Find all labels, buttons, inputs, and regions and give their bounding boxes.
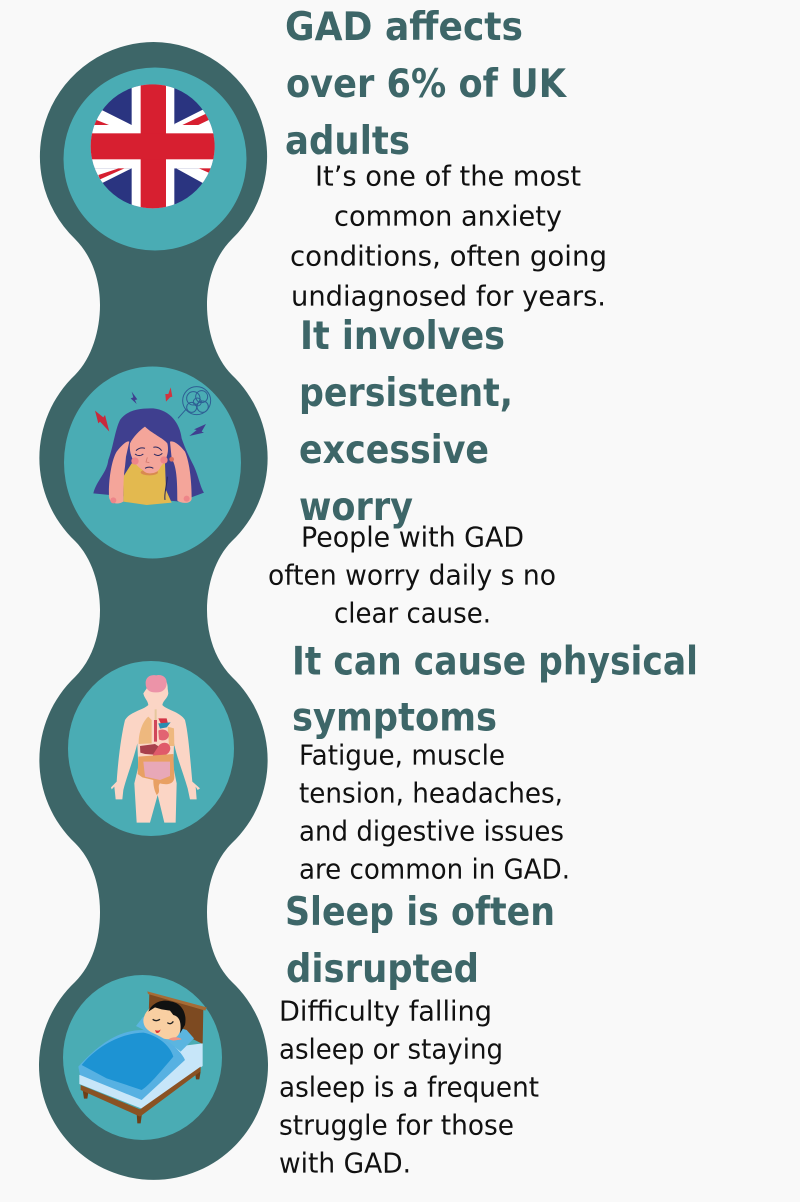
fact 1 text: [285, 4, 607, 312]
heading: disrupted sleep: [285, 889, 555, 992]
body: sleep detail: asleep is a frequent: [279, 1070, 539, 1104]
heading: GAD prevalence: GAD affects: [285, 4, 523, 50]
body: sleep detail: Difficulty falling: [279, 994, 492, 1028]
heading: physical symptoms: [292, 638, 698, 740]
icon: UK flag: [64, 68, 246, 250]
body: worry detail: often worry daily s no: [268, 558, 556, 592]
body: prevalence detail: undiagnosed for years.: [291, 280, 606, 312]
infographic: [39, 10, 696, 1180]
body: sleep detail: struggle for those: [279, 1108, 514, 1142]
body: symptoms detail: and digestive issues: [299, 814, 564, 848]
body: prevalence detail: It’s one of the most: [315, 160, 581, 192]
body: sleep detail: asleep or staying: [279, 1032, 503, 1066]
body: prevalence detail: conditions, often going: [290, 240, 607, 272]
heading: physical symptoms: It can cause physical: [292, 638, 698, 684]
body: symptoms detail: are common in GAD.: [299, 852, 570, 886]
heading: persistent worry: It involves: [300, 313, 505, 359]
heading: persistent worry: [299, 313, 513, 530]
fact 4 text: [279, 889, 555, 1180]
fact 3 text: [292, 638, 698, 886]
heading: persistent worry: excessive: [299, 427, 489, 473]
body: worry detail: clear cause.: [334, 596, 491, 630]
heading: GAD prevalence: over 6% of UK: [286, 61, 567, 107]
body: prevalence detail: [290, 160, 607, 312]
timeline spine: [39, 42, 268, 1180]
heading: physical symptoms: symptoms: [292, 694, 497, 740]
body: worry detail: [268, 520, 556, 630]
icon: human body organs: [68, 661, 234, 836]
icon: person sleeping in bed: [63, 975, 222, 1140]
heading: persistent worry: persistent,: [299, 370, 513, 416]
body: symptoms detail: Fatigue, muscle: [299, 738, 505, 772]
icon: worried woman: [64, 366, 241, 558]
heading: disrupted sleep: disrupted: [286, 946, 479, 992]
body: sleep detail: with GAD.: [279, 1146, 411, 1180]
body: worry detail: People with GAD: [301, 520, 524, 554]
heading: GAD prevalence: [285, 4, 567, 164]
body: symptoms detail: [299, 738, 570, 886]
heading: disrupted sleep: Sleep is often: [285, 889, 555, 935]
body: symptoms detail: tension, headaches,: [299, 776, 563, 810]
body: prevalence detail: common anxiety: [334, 200, 562, 232]
heading: GAD prevalence: adults: [285, 118, 410, 164]
heading: persistent worry: worry: [299, 484, 413, 530]
body: sleep detail: [279, 994, 539, 1180]
fact 2 text: [268, 313, 556, 630]
